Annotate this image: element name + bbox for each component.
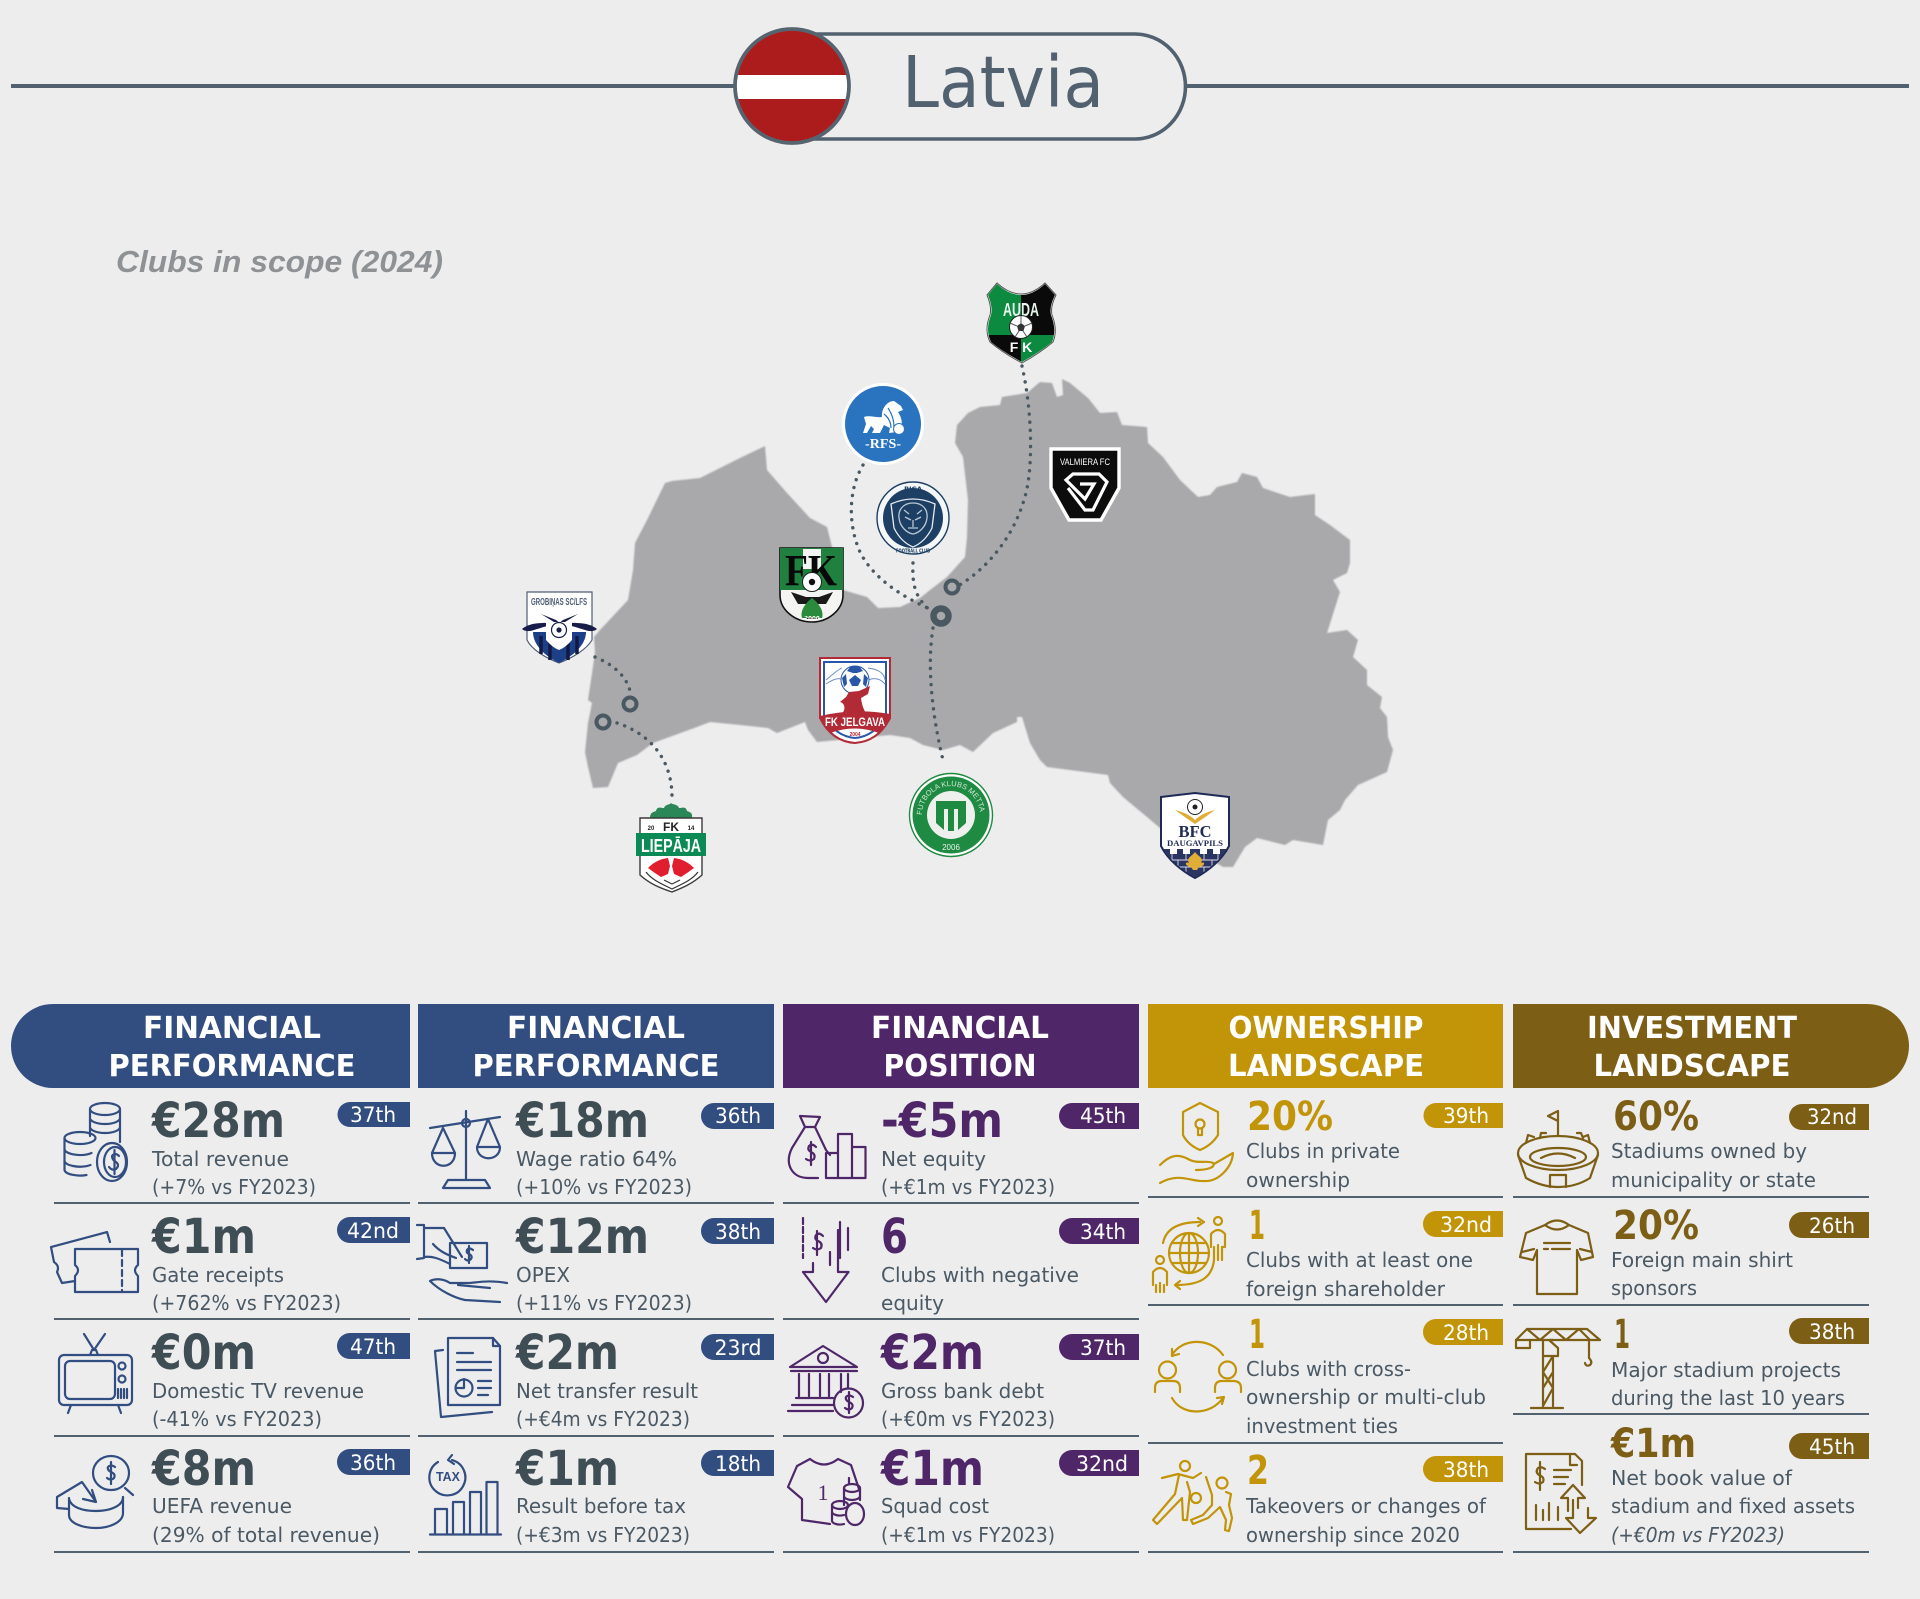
label: foreign shareholder <box>1246 1277 1446 1301</box>
value: €8m <box>151 1441 256 1497</box>
value: €1m <box>880 1441 984 1497</box>
icon: falling arrow <box>803 1218 848 1302</box>
label: ownership since 2020 <box>1246 1523 1460 1547</box>
label: (+10% vs FY2023) <box>516 1175 692 1199</box>
logo: Liepaja: 20 <box>648 826 655 832</box>
label: OPEX <box>516 1263 570 1287</box>
label <box>881 1494 1055 1547</box>
rank badge <box>1424 1103 1503 1128</box>
logo: Riga FC: RIGA <box>904 485 922 493</box>
logo: RFS: -RFS- <box>865 437 901 452</box>
icon: money bag and bars <box>789 1116 866 1178</box>
metric: major stadium projects <box>1513 1312 1869 1414</box>
label: (+762% vs FY2023) <box>152 1291 341 1315</box>
map outline <box>585 379 1393 867</box>
logo: FK Jelgava: FK JELGAVA <box>825 717 885 729</box>
rank badge <box>338 1102 410 1127</box>
map of Latvia with clubs <box>522 282 1394 893</box>
rank badge: 34th <box>1080 1220 1126 1244</box>
rank badge <box>1059 1103 1139 1129</box>
rank badge <box>1059 1334 1139 1360</box>
subtitle: clubs in scope: Clubs in scope (2024) <box>116 244 443 279</box>
logo: Riga FC: FOOTBALL CLUB <box>896 548 930 554</box>
rank badge: 45th <box>1080 1104 1126 1128</box>
rank badge: 36th <box>350 1451 396 1475</box>
label: (-41% vs FY2023) <box>152 1407 322 1431</box>
heading <box>1148 1004 1503 1088</box>
value: 20% <box>1613 1203 1699 1249</box>
rank badge: 36th <box>715 1104 761 1128</box>
label <box>1611 1466 1855 1547</box>
label: UEFA revenue <box>152 1494 292 1518</box>
icon: footballers <box>1153 1461 1232 1531</box>
value: 1 <box>1614 1312 1630 1358</box>
metric: foreign shareholder <box>1148 1203 1503 1305</box>
value: €1m <box>515 1441 619 1497</box>
value: €1m <box>151 1209 256 1265</box>
metric: gate receipts <box>51 1209 410 1319</box>
logo: RFS <box>842 383 924 465</box>
logo: Liepaja: 14 <box>688 826 695 832</box>
heading <box>1513 1004 1909 1088</box>
heading <box>418 1004 774 1088</box>
rank badge: 32nd <box>1807 1105 1857 1129</box>
value: €2m <box>880 1325 984 1381</box>
logo: BFC Daugavpils <box>1161 793 1229 880</box>
metric: OPEX <box>417 1209 774 1319</box>
panel: financial position <box>783 1004 1139 1552</box>
label <box>1611 1248 1793 1300</box>
icon: cycle between two people <box>1155 1342 1241 1412</box>
label <box>1246 1139 1400 1192</box>
heading <box>11 1004 410 1088</box>
rank badge: 47th <box>350 1335 396 1359</box>
logo: FK Metta: 2006 <box>942 843 960 852</box>
logo: Liepaja <box>636 803 706 892</box>
rank badge: 32nd <box>1076 1452 1128 1476</box>
value: 1 <box>1249 1312 1265 1358</box>
label <box>516 1263 692 1315</box>
label: (+€1m vs FY2023) <box>881 1175 1055 1199</box>
label <box>516 1379 698 1431</box>
label: (+7% vs FY2023) <box>152 1175 316 1199</box>
logo: Grobinas: GROBIŅAS SC/LFS <box>531 597 587 608</box>
label: Major stadium projects <box>1611 1358 1841 1382</box>
header band: Latvia title with flag <box>11 26 1909 146</box>
rank badge: 38th <box>715 1220 761 1244</box>
value: 6 <box>881 1209 908 1265</box>
logo: FK Tukums: 2000 <box>804 616 820 622</box>
panel: ownership landscape <box>1148 1004 1503 1552</box>
title: Latvia <box>902 41 1104 124</box>
label: Clubs in private <box>1246 1139 1400 1163</box>
rank badge: 37th <box>1080 1336 1126 1360</box>
logo: FK Metta: FUTBOLA KLUBS METTA <box>916 780 985 814</box>
title pill <box>792 34 1185 139</box>
rank badge <box>1423 1211 1503 1237</box>
heading: LANDSCAPE <box>1228 1049 1424 1084</box>
logo: BFC Daugavpils: BFC <box>1178 822 1212 841</box>
label <box>516 1147 692 1199</box>
value: €12m <box>515 1209 649 1265</box>
label <box>881 1379 1055 1431</box>
panel: financial performance (costs) <box>417 1004 774 1552</box>
label: ownership or multi-club <box>1246 1385 1486 1409</box>
heading: FINANCIAL <box>507 1011 685 1046</box>
tax text: TAX <box>436 1469 460 1484</box>
label: Gate receipts <box>152 1263 284 1287</box>
logo: BFC Daugavpils: DAUGAVPILS <box>1167 839 1224 848</box>
logo: Liepaja: LIEPĀJA <box>641 836 701 856</box>
heading: FINANCIAL <box>143 1011 321 1046</box>
value: 20% <box>1247 1094 1333 1140</box>
label: stadium and fixed assets <box>1611 1494 1855 1518</box>
icon: tickets <box>51 1232 138 1292</box>
rank badge <box>701 1334 774 1360</box>
heading: INVESTMENT <box>1587 1011 1798 1046</box>
label: Net equity <box>881 1147 986 1171</box>
icon: stadium <box>1518 1111 1598 1187</box>
label <box>151 1147 316 1199</box>
heading: OWNERSHIP <box>1228 1011 1424 1046</box>
label: during the last 10 years <box>1611 1386 1845 1410</box>
rank badge <box>1059 1450 1139 1476</box>
rank badge <box>701 1450 774 1476</box>
heading: FINANCIAL <box>871 1011 1049 1046</box>
metric: squad cost <box>783 1441 1139 1552</box>
label: Squad cost <box>881 1494 989 1518</box>
rank badge: 18th <box>715 1452 761 1476</box>
label: (+€0m vs FY2023) <box>1611 1523 1785 1547</box>
logo: Valmiera FC: VALMIERA FC <box>1060 457 1110 468</box>
icon: document <box>435 1338 500 1417</box>
icon: television <box>59 1334 132 1413</box>
metric: result before tax <box>418 1441 774 1552</box>
heading <box>783 1004 1139 1088</box>
label: (+€1m vs FY2023) <box>881 1523 1055 1547</box>
label <box>516 1494 690 1547</box>
logo: Liepaja: FK <box>663 820 679 834</box>
rank badge <box>1789 1212 1869 1238</box>
label: Net book value of <box>1611 1466 1793 1490</box>
label: Net transfer result <box>516 1379 698 1403</box>
rank badge <box>337 1449 410 1475</box>
icon: globe and people <box>1153 1217 1225 1292</box>
logo: Valmiera FC <box>1051 449 1119 520</box>
label: Foreign main shirt <box>1611 1248 1793 1272</box>
value: -€5m <box>881 1093 1003 1149</box>
label: Clubs with cross- <box>1246 1357 1411 1381</box>
label: Clubs with negative <box>881 1263 1079 1287</box>
icon: coins <box>64 1103 127 1181</box>
label <box>1246 1357 1486 1438</box>
logo: FK Tukums <box>780 546 843 622</box>
icon: crane <box>1516 1329 1600 1408</box>
value: 1 <box>1249 1203 1265 1249</box>
metric: net book value <box>1513 1421 1869 1552</box>
icon: shield in hand <box>1160 1103 1233 1183</box>
label: Gross bank debt <box>881 1379 1044 1403</box>
icon: hand giving money <box>417 1225 507 1302</box>
value: €18m <box>515 1093 649 1149</box>
label <box>152 1379 364 1431</box>
label <box>1611 1358 1845 1410</box>
logo: Grobinas <box>522 592 597 663</box>
label: investment ties <box>1246 1414 1398 1438</box>
value: €2m <box>515 1325 619 1381</box>
label: Domestic TV revenue <box>152 1379 364 1403</box>
panel: investment landscape <box>1513 1004 1909 1552</box>
value: €28m <box>151 1093 285 1149</box>
rank badge <box>701 1218 774 1244</box>
label <box>152 1263 341 1315</box>
icon: tax and bars <box>429 1455 501 1534</box>
metric: gross bank debt <box>783 1325 1139 1436</box>
label: (+€0m vs FY2023) <box>881 1407 1055 1431</box>
rank badge <box>337 1217 410 1243</box>
metric: cross-ownership <box>1148 1312 1503 1443</box>
icon: shirt with coins <box>788 1459 864 1525</box>
label: Total revenue <box>151 1147 289 1171</box>
logo: Auda: F K <box>1010 339 1032 355</box>
rank badge: 42nd <box>347 1219 399 1243</box>
metric: net transfer result <box>418 1325 774 1436</box>
logo: FK Tukums: FK <box>785 546 837 595</box>
icon: UEFA revenue pie and magnifier <box>57 1456 133 1528</box>
heading: LANDSCAPE <box>1594 1049 1790 1084</box>
rank badge <box>1423 1319 1503 1345</box>
rank badge <box>701 1103 774 1129</box>
rank badge: 38th <box>1809 1320 1855 1344</box>
heading: POSITION <box>884 1049 1036 1084</box>
label <box>1246 1248 1473 1301</box>
value: €1m <box>1610 1421 1696 1467</box>
label: (+€4m vs FY2023) <box>516 1407 690 1431</box>
icon: bank <box>788 1346 863 1418</box>
icon: financial document with arrows <box>1526 1454 1596 1533</box>
metric: clubs with negative equity <box>783 1209 1139 1319</box>
metric: shirt sponsors <box>1513 1203 1869 1305</box>
value: €0m <box>151 1325 256 1381</box>
label <box>881 1263 1079 1315</box>
rank badge <box>1789 1104 1869 1130</box>
label <box>1611 1139 1816 1192</box>
label: equity <box>881 1291 944 1315</box>
rank badge: 32nd <box>1440 1213 1492 1237</box>
heading: PERFORMANCE <box>472 1049 720 1084</box>
metric: net equity <box>783 1093 1139 1203</box>
rank badge: 28th <box>1443 1321 1489 1345</box>
label: Stadiums owned by <box>1611 1139 1807 1163</box>
value: 2 <box>1247 1448 1269 1494</box>
label: Result before tax <box>516 1494 686 1518</box>
metric: takeovers <box>1148 1448 1503 1552</box>
rank badge <box>1423 1456 1503 1482</box>
icon: shirt <box>1520 1220 1593 1294</box>
label <box>881 1147 1055 1199</box>
rank badge <box>1789 1433 1869 1459</box>
rank badge: 38th <box>1443 1458 1489 1482</box>
metric: private ownership <box>1148 1094 1503 1197</box>
rank badge <box>337 1333 410 1359</box>
metric: wage ratio <box>418 1093 774 1203</box>
logo: Auda: AUDA <box>1003 300 1039 320</box>
dotted connectors and location rings <box>595 366 1031 797</box>
metric: domestic TV revenue <box>54 1325 410 1436</box>
logo: Riga FC <box>877 482 949 554</box>
rank badge: 37th <box>350 1103 396 1127</box>
icon: scales <box>430 1111 500 1188</box>
icon: Latvian flag <box>730 26 854 146</box>
label <box>152 1494 380 1547</box>
label: ownership <box>1246 1168 1350 1192</box>
metric: total revenue <box>54 1093 410 1203</box>
value: 60% <box>1613 1094 1699 1140</box>
logo: FK Jelgava: 2004 <box>849 732 861 738</box>
rank badge: 23rd <box>714 1336 762 1360</box>
label: municipality or state <box>1611 1168 1816 1192</box>
label: (29% of total revenue) <box>152 1523 380 1547</box>
rank badge: 39th <box>1443 1104 1489 1128</box>
label: Wage ratio 64% <box>516 1147 677 1171</box>
rank badge <box>1789 1318 1869 1344</box>
logo: Auda <box>986 282 1057 364</box>
label: sponsors <box>1611 1276 1697 1300</box>
rank badge <box>1059 1218 1139 1244</box>
logo: FK Jelgava <box>820 658 890 743</box>
label: (+11% vs FY2023) <box>516 1291 692 1315</box>
label: Takeovers or changes of <box>1245 1494 1487 1518</box>
rank badge: 26th <box>1809 1214 1855 1238</box>
shirt number: 1 <box>818 1480 828 1505</box>
label: Clubs with at least one <box>1246 1248 1473 1272</box>
metric: UEFA revenue <box>54 1441 410 1552</box>
rank badge: 45th <box>1809 1435 1855 1459</box>
logo: FK Metta <box>908 772 994 858</box>
panel: financial performance (revenue) <box>11 1004 410 1552</box>
label <box>1245 1494 1487 1547</box>
heading: PERFORMANCE <box>108 1049 356 1084</box>
metric: stadiums owned <box>1513 1094 1869 1197</box>
label: (+€3m vs FY2023) <box>516 1523 690 1547</box>
